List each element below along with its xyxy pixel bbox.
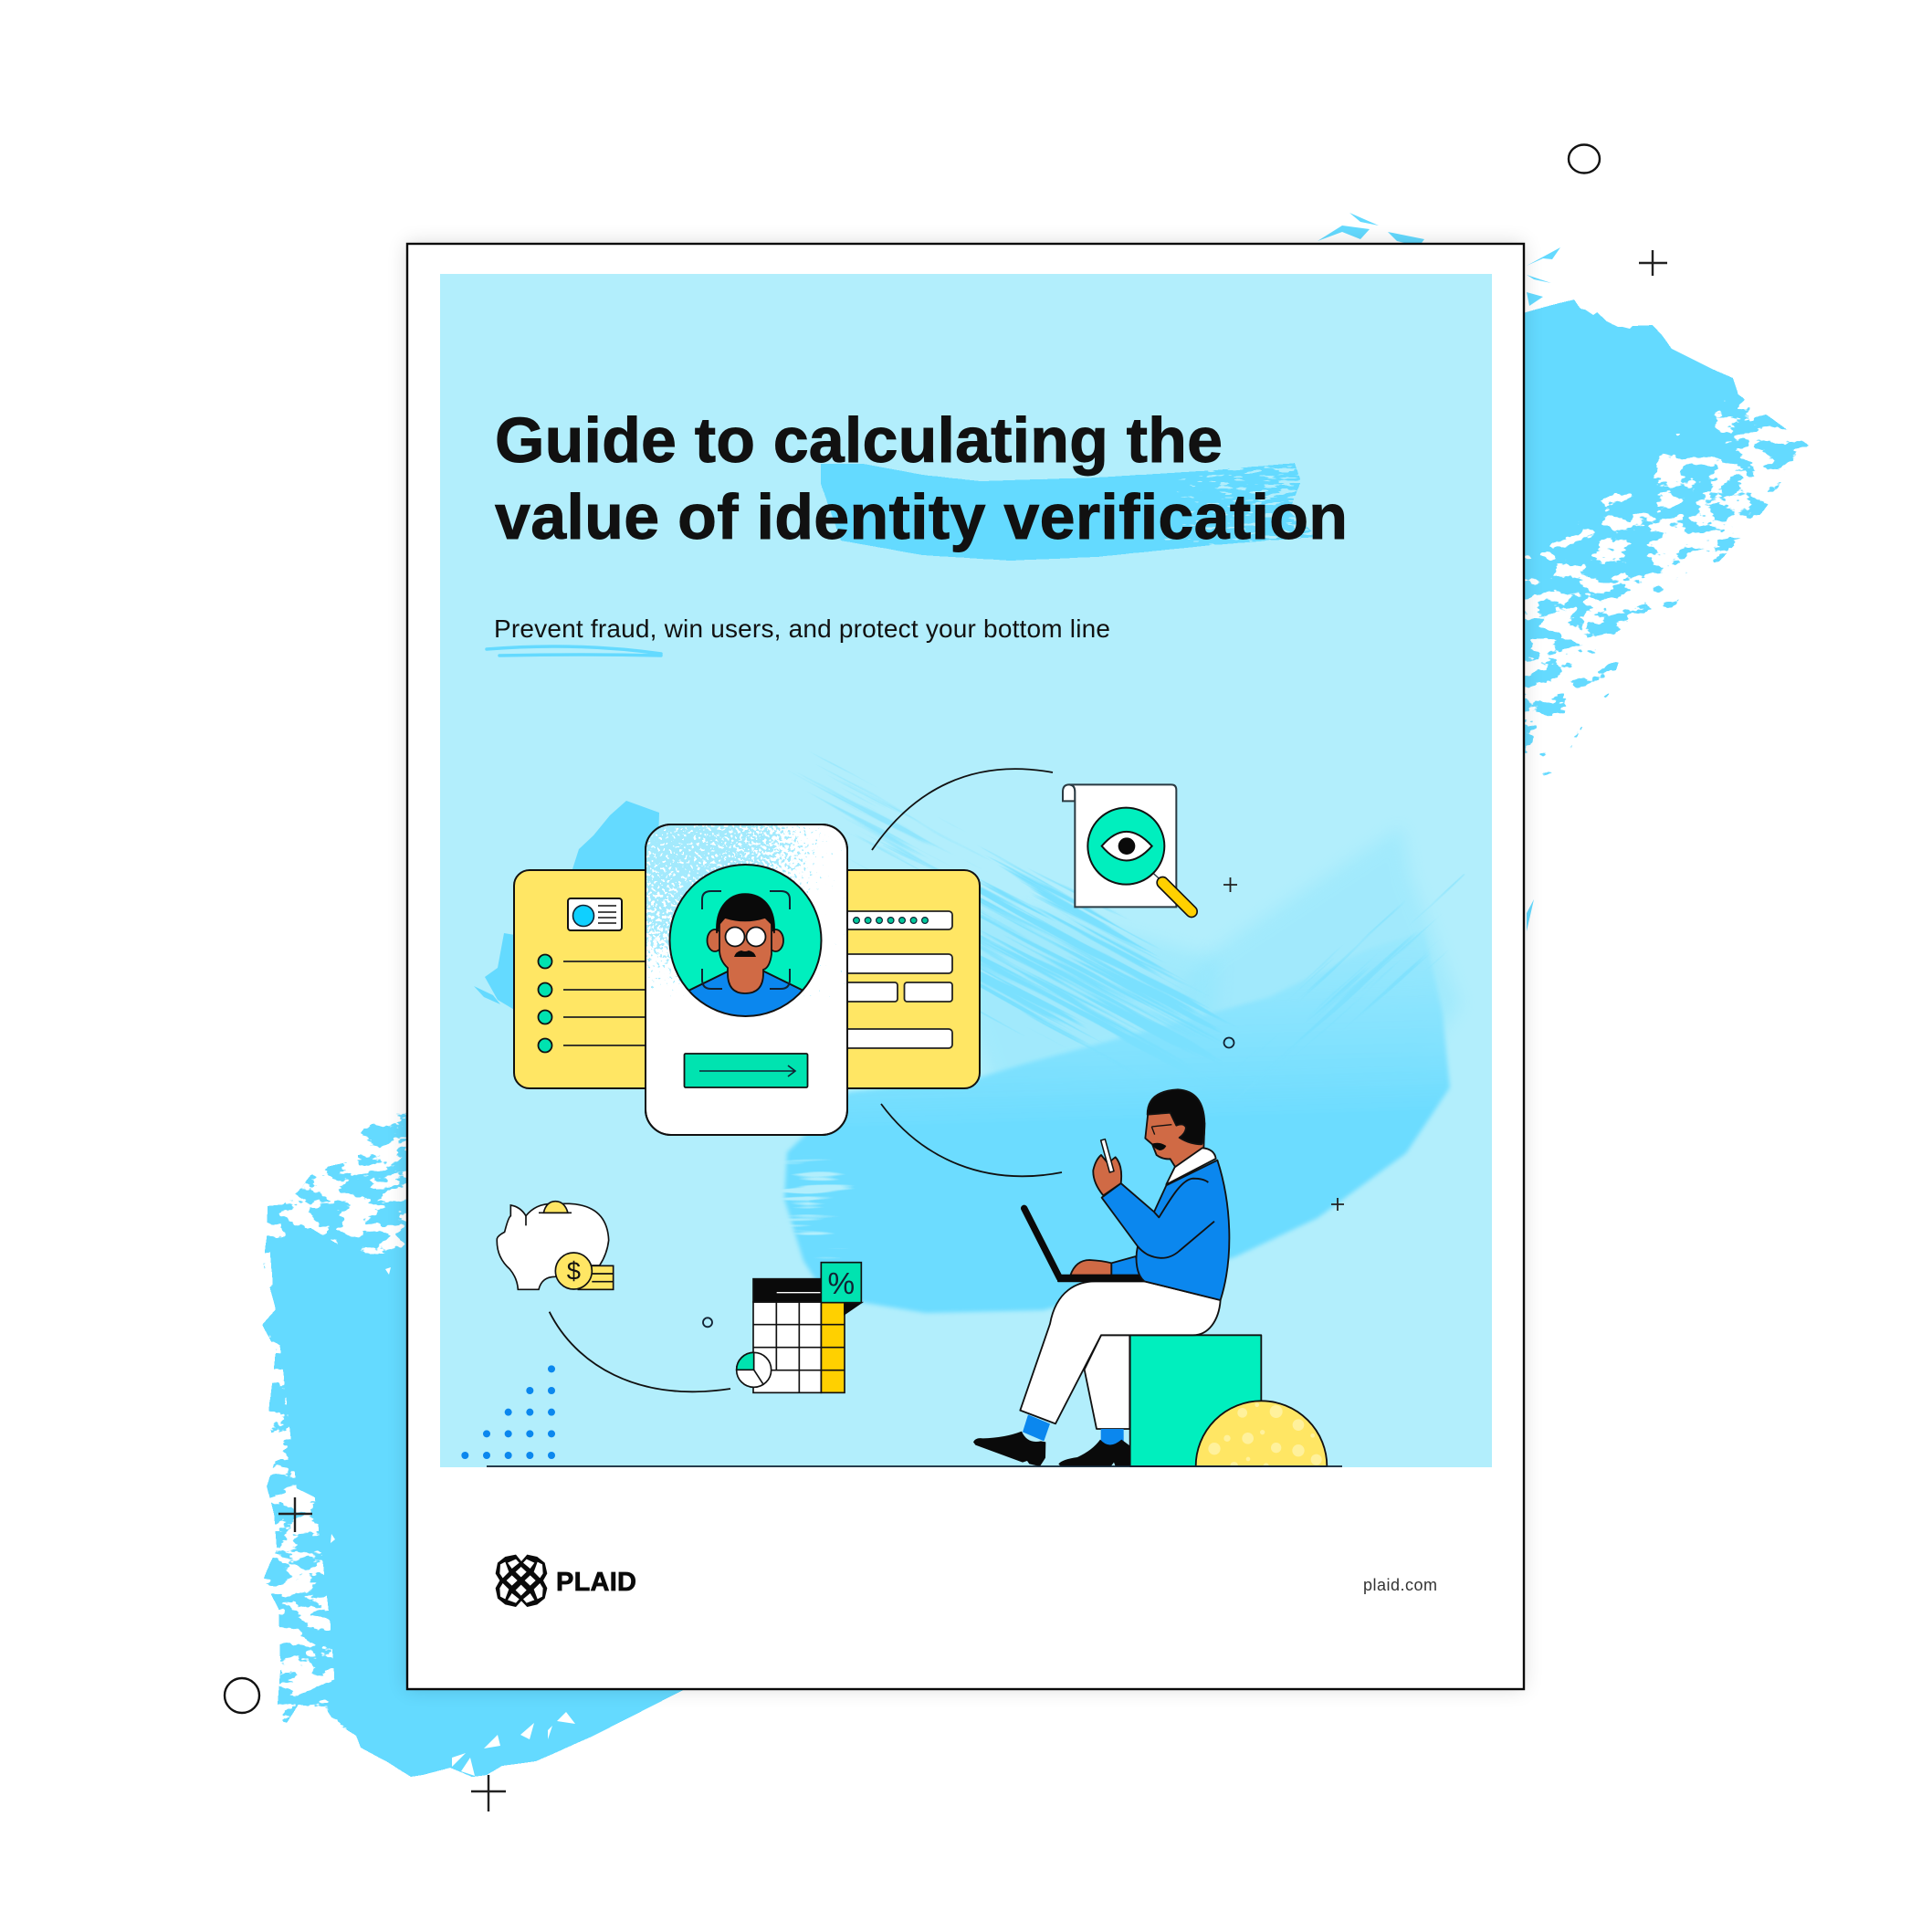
- brush: diagonal light wash: [981, 907, 1211, 1072]
- man: shirt collar: [1166, 1148, 1216, 1184]
- brush: subtitle underline: [487, 646, 661, 656]
- brush: feathered left edge: [782, 1160, 855, 1258]
- decoration: small circle: [703, 1318, 712, 1327]
- connector arc bottom: [550, 1312, 730, 1391]
- connector arc top: [872, 769, 1053, 850]
- brush: rising streak texture: [1309, 874, 1465, 1031]
- ground line: [487, 1464, 1342, 1468]
- logo mark: [496, 1555, 547, 1607]
- icon: document with magnifier eye: [1063, 784, 1192, 911]
- button: [685, 1054, 807, 1087]
- man: neck and head: [1145, 1089, 1204, 1167]
- page shadow: [406, 243, 1524, 1689]
- title: Guide to calculating the: [495, 404, 1223, 476]
- panel: report page: [407, 244, 1524, 1689]
- decoration: plus near document: [1223, 877, 1237, 892]
- icon: piggy bank: [497, 1202, 614, 1289]
- brush: main large stroke: [784, 931, 1450, 1313]
- decoration: outline circle top right: [1569, 144, 1600, 173]
- man: laptop: [1024, 1208, 1146, 1281]
- dot grid: [461, 1365, 555, 1459]
- title: value of identity verification: [495, 481, 1348, 552]
- footer logo: [496, 1555, 636, 1607]
- brush strokes inside cover: [474, 463, 1514, 1313]
- checklist: [539, 955, 648, 1052]
- block: green cube: [1130, 1335, 1261, 1466]
- title: [495, 404, 1348, 552]
- decoration: plus near man: [1331, 1198, 1344, 1211]
- panel: yellow form card: [514, 870, 980, 1088]
- brush: diagonal streak texture: [883, 845, 1224, 1048]
- brush: behind title: [821, 463, 1318, 561]
- man: far sock and shoe: [1058, 1429, 1129, 1466]
- brush: faint upper diagonal streaks: [801, 754, 1019, 922]
- man: near sock and shoe: [973, 1414, 1050, 1466]
- connector arc right: [881, 1104, 1062, 1176]
- icon: calendar spreadsheet: [737, 1263, 861, 1392]
- phone speckle texture: [646, 824, 847, 998]
- panel: cover background: [440, 274, 1492, 1467]
- decoration: small circle: [1223, 1037, 1234, 1048]
- background brush: bottom left: [262, 1096, 694, 1777]
- decoration: plus left: [278, 1497, 312, 1532]
- man: hand on laptop and sleeve: [1070, 1256, 1139, 1276]
- icon: calendar spreadsheet: %: [828, 1267, 855, 1301]
- block: yellow dome: [1196, 1401, 1327, 1470]
- man: near leg: [1020, 1281, 1221, 1423]
- icon: id card: [568, 898, 622, 930]
- icon: piggy bank: $: [567, 1257, 581, 1286]
- decoration: plus bottom: [471, 1775, 506, 1811]
- password dots: [854, 918, 928, 923]
- man: raised hand holding phone: [1093, 1139, 1121, 1195]
- man: far leg: [1085, 1335, 1129, 1429]
- brush: upper right fade: [1160, 835, 1457, 1024]
- form fields: [826, 911, 952, 1048]
- brush: behind left card: [474, 801, 659, 1013]
- panel: phone: [646, 824, 847, 1135]
- decoration: plus top right: [1639, 250, 1667, 276]
- avatar: [670, 865, 822, 1023]
- decoration: outline circle bottom left: [225, 1678, 259, 1713]
- footer url: plaid.com: [1363, 1576, 1437, 1594]
- man: sweater: [1102, 1160, 1229, 1300]
- illustration: piggy bank, calendar and dots: [461, 1202, 861, 1459]
- subtitle: Prevent fraud, win users, and protect your bottom line: [494, 614, 1110, 643]
- illustration: seated man with laptop and blocks: [487, 1089, 1342, 1470]
- background brush: top right: [1318, 213, 1817, 931]
- logo wordmark: PLAID: [556, 1568, 636, 1597]
